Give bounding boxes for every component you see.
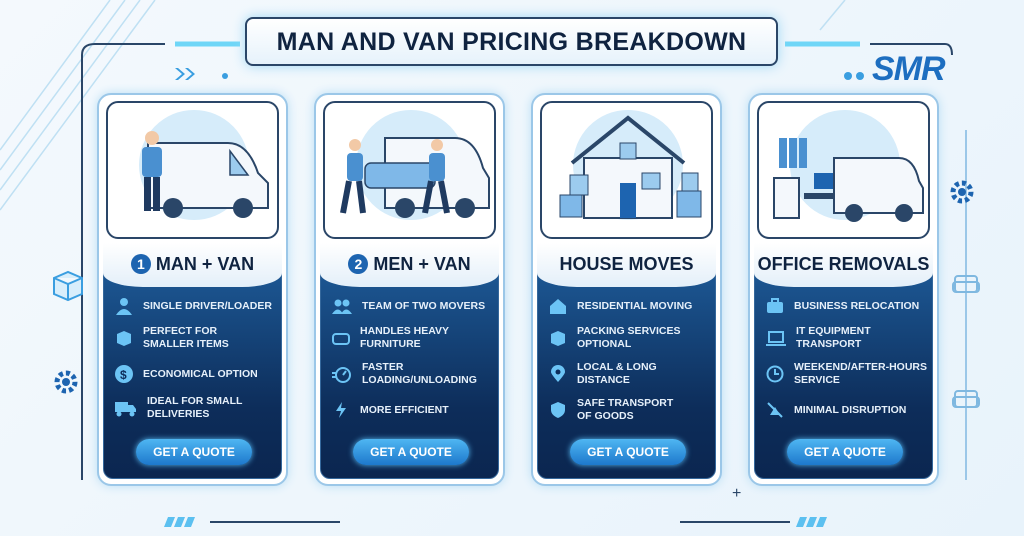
decorative frame: + xyxy=(732,485,741,502)
list items: SINGLE DRIVER/LOADER xyxy=(143,300,272,312)
panel: office removals: WEEKEND/AFTER-HOURS xyxy=(794,361,927,373)
icon: gear left xyxy=(54,370,78,394)
button: GET A QUOTE xyxy=(370,445,452,459)
heading: OFFICE REMOVALS xyxy=(758,254,929,274)
illustration: house with boxes xyxy=(540,101,713,239)
illustration: two men carrying sofa xyxy=(323,101,496,239)
button: GET A QUOTE xyxy=(153,445,235,459)
panel: 1 man + van: DELIVERIES xyxy=(147,408,209,420)
heading xyxy=(754,243,933,287)
panel: office removals xyxy=(748,93,939,486)
panel: office removals: TRANSPORT xyxy=(796,338,861,350)
panel: 1 man + van: $ xyxy=(120,368,127,382)
button xyxy=(136,439,252,465)
illustration: office with van xyxy=(757,101,930,239)
panel: house moves: SAFE TRANSPORT xyxy=(577,397,673,409)
heading: 1 xyxy=(137,256,145,272)
heading xyxy=(103,243,282,287)
icon: chair right lower xyxy=(952,390,980,408)
panel: house moves: LOCAL & LONG xyxy=(577,361,657,373)
icon: chair right xyxy=(952,275,980,293)
panel: 1 man + van: ECONOMICAL OPTION xyxy=(143,368,258,380)
panel: office removals: MINIMAL DISRUPTION xyxy=(794,404,906,416)
panel: office removals: IT EQUIPMENT xyxy=(796,325,871,337)
panel: house moves: OF GOODS xyxy=(577,410,634,422)
heading: MEN + VAN xyxy=(373,254,471,274)
title xyxy=(245,17,778,66)
list items: RESIDENTIAL MOVING xyxy=(577,300,692,312)
heading xyxy=(537,243,716,287)
heading: 2 xyxy=(354,256,362,272)
panel: office removals: SERVICE xyxy=(794,374,840,386)
panel: 2 men + van: FASTER xyxy=(362,361,403,373)
panel: 2 men + van: MORE EFFICIENT xyxy=(360,404,449,416)
icon: box left xyxy=(53,270,83,302)
heading: MAN + VAN xyxy=(156,254,254,274)
button: GET A QUOTE xyxy=(804,445,886,459)
list items xyxy=(767,298,919,313)
list items xyxy=(332,300,485,314)
button xyxy=(570,439,686,465)
panel: 1 man + van: SMALLER ITEMS xyxy=(143,338,229,350)
title: MAN AND VAN PRICING BREAKDOWN xyxy=(277,28,746,56)
list items xyxy=(116,298,272,315)
panel: 1 man + van: IDEAL FOR SMALL xyxy=(147,395,242,407)
button: GET A QUOTE xyxy=(587,445,669,459)
logo: SMR: SMR xyxy=(872,50,945,88)
list items xyxy=(550,299,692,314)
button xyxy=(787,439,903,465)
panel: house moves: OPTIONAL xyxy=(577,338,631,350)
illustration: man with van xyxy=(106,101,279,239)
list items: BUSINESS RELOCATION xyxy=(794,300,919,312)
button xyxy=(353,439,469,465)
panel: house moves xyxy=(531,93,722,486)
panel: house moves: PACKING SERVICES xyxy=(577,325,680,337)
icon: gear right xyxy=(950,180,974,204)
panel: 2 men + van: FURNITURE xyxy=(360,338,421,350)
heading: HOUSE MOVES xyxy=(559,254,694,274)
panel: house moves: DISTANCE xyxy=(577,374,630,386)
list items: TEAM OF TWO MOVERS xyxy=(362,300,485,312)
panel: 1 man + van xyxy=(97,93,288,486)
panel: 1 man + van: PERFECT FOR xyxy=(143,325,217,337)
panel: 2 men + van xyxy=(314,93,505,486)
panel: 2 men + van: HANDLES HEAVY xyxy=(360,325,449,337)
panel: 2 men + van: LOADING/UNLOADING xyxy=(362,374,477,386)
heading xyxy=(320,243,499,287)
